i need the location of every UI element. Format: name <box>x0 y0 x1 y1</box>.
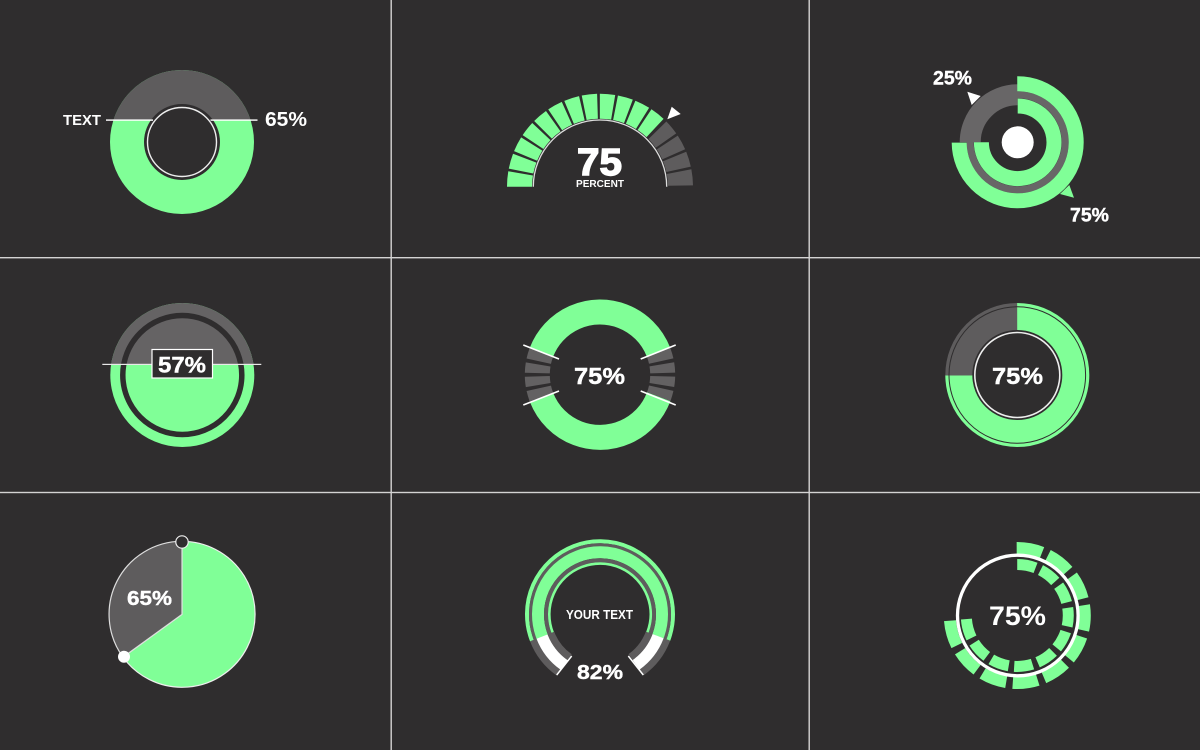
label box: 57% <box>152 350 212 378</box>
green ring arcs <box>519 294 681 456</box>
panel: concentric rings 25/75 <box>933 68 1109 226</box>
marker: top dot <box>176 536 188 548</box>
panel: donut 65% with labels <box>63 70 307 214</box>
panel: dashed rings 75% <box>950 548 1085 683</box>
gauge inner arc <box>533 120 667 187</box>
panel: fill gauge 57% <box>102 303 261 447</box>
inner dashed ring <box>966 564 1068 666</box>
panel: segmented gauge 75 percent <box>486 73 714 301</box>
value: 75: 75 <box>577 142 622 184</box>
rings chart <box>959 84 1076 201</box>
value: 75%: 75% <box>989 601 1046 631</box>
donut chart <box>106 70 258 214</box>
value: 75%: 75% <box>574 363 625 389</box>
gauge green segments <box>520 106 680 267</box>
panel: donut quadrant 75% <box>949 307 1086 443</box>
label box: 57%: 57% <box>158 352 206 378</box>
outer dashed ring <box>950 548 1085 683</box>
arc layers <box>500 515 700 714</box>
donut chart <box>949 307 1086 443</box>
pointer: white triangle <box>967 92 981 105</box>
panel: pie chart 65% <box>109 536 255 687</box>
white divider lines <box>523 345 676 405</box>
gray tick segments <box>519 294 681 455</box>
value: 82%: 82% <box>577 661 623 684</box>
panel: donut with side ticks 75% <box>519 294 681 456</box>
label: PERCENT: PERCENT <box>576 178 625 190</box>
value: 75%: 75% <box>992 363 1043 389</box>
marker: white dot <box>118 651 130 663</box>
pie green slice <box>123 541 255 687</box>
panel: layered arc 82% <box>500 515 700 714</box>
label: 75%: 75% <box>1070 206 1109 226</box>
white ring <box>958 555 1078 676</box>
label: YOUR TEXT: YOUR TEXT <box>566 608 633 622</box>
label: 65%: 65% <box>265 109 307 131</box>
label: TEXT: TEXT <box>63 112 101 129</box>
ringed disc chart <box>102 303 261 447</box>
gauge gray segments <box>486 73 714 301</box>
pie gray slice <box>109 541 182 657</box>
pointer: green triangle <box>1060 185 1074 198</box>
label: 25%: 25% <box>933 68 972 90</box>
pointer triangle <box>667 107 681 119</box>
value: 65%: 65% <box>127 587 172 610</box>
